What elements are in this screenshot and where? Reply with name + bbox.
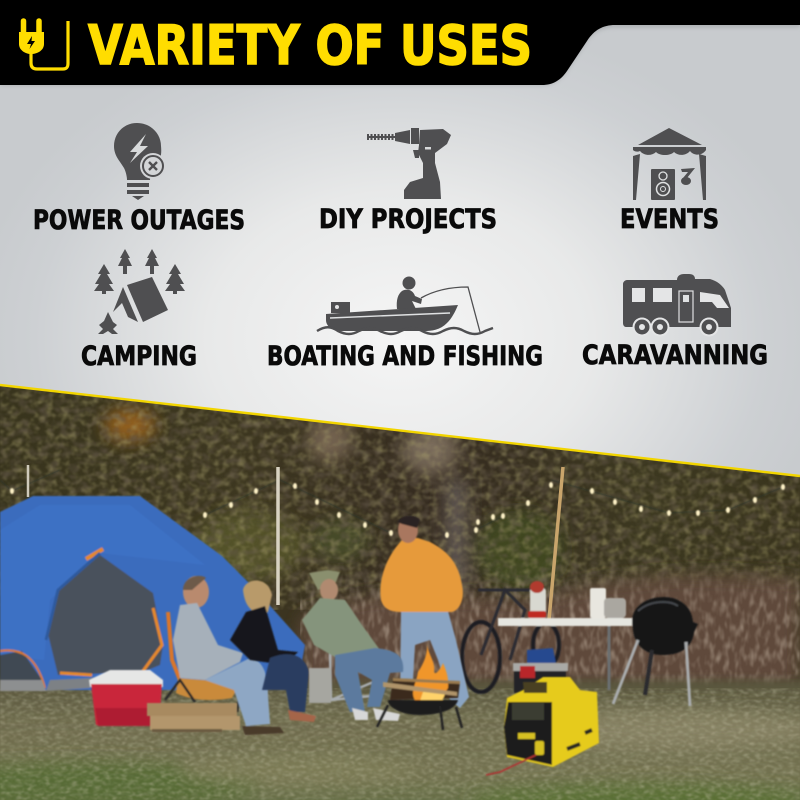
table items (590, 588, 626, 618)
seated woman in black jacket (230, 580, 316, 722)
stacked firewood (147, 703, 240, 732)
photo ground: grass (0, 680, 800, 800)
use case: power outages (33, 123, 245, 236)
yellow portable generator (486, 677, 599, 775)
title: VARIETY OF USES (88, 14, 532, 77)
photo background: autumn forest (0, 380, 800, 700)
orange folding chair (165, 612, 240, 712)
kettle grill (613, 597, 698, 706)
head (398, 517, 418, 543)
use case: events (620, 128, 719, 235)
label: camping: CAMPING (81, 341, 197, 372)
folding table (498, 618, 632, 690)
blue bag and cooler (513, 648, 568, 693)
blue tent (0, 496, 305, 691)
light grey panel with yellow diagonal edge (0, 0, 800, 476)
jacket (380, 538, 463, 612)
icon: light bulb with x (114, 123, 166, 200)
use case: caravanning (582, 274, 768, 371)
header banner shadow (0, 20, 800, 85)
use case: boating and fishing (267, 276, 543, 372)
jeans (400, 611, 469, 708)
lantern (528, 581, 546, 618)
label: caravanning: CARAVANNING (582, 340, 768, 371)
seated man in plaid shirt (165, 576, 284, 735)
header banner (0, 0, 800, 85)
use case: camping (81, 249, 197, 372)
seated man in camo jacket (302, 570, 403, 721)
icon: canopy tent with speaker (633, 128, 706, 200)
icon: plug and cord (19, 21, 68, 69)
label: boating and fishing: BOATING AND FISHING (267, 341, 543, 372)
label: DIY projects: DIY PROJECTS (319, 204, 497, 235)
use case: DIY projects (319, 128, 497, 235)
bicycle and table group (462, 581, 698, 706)
label: power outages: POWER OUTAGES (33, 205, 245, 236)
dry brush (300, 560, 800, 690)
icon: cordless drill (367, 128, 451, 199)
red cooler (89, 670, 163, 726)
photo: campsite scene (0, 380, 800, 800)
bicycle (462, 590, 559, 692)
icon: motorhome (623, 274, 731, 336)
icon: fisherman in boat (317, 276, 493, 334)
poles (28, 465, 563, 620)
string lights (0, 470, 785, 538)
camp chair (309, 650, 380, 703)
fire pit with flames (377, 643, 462, 730)
icon: tent, trees and campfire (94, 249, 185, 334)
standing man in orange jacket (380, 516, 469, 708)
label: events: EVENTS (620, 204, 719, 235)
